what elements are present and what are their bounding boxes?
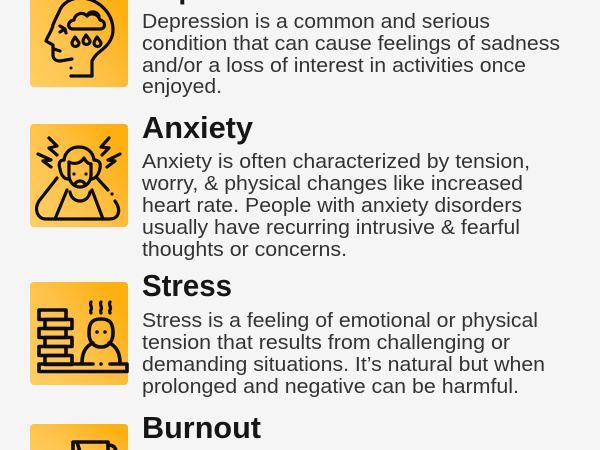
text: anxiety description: Anxiety is often characterized by tension,: [142, 151, 530, 173]
text: anxiety description: [141, 151, 530, 261]
text: anxiety description: heart rate. People with anxiety disorders: [142, 195, 522, 217]
text: depression description: [142, 11, 560, 98]
text: stress description: demanding situations. It’s natural but when: [142, 354, 545, 376]
text: depression description: enjoyed.: [142, 76, 222, 98]
icon: head with rain cloud: [30, 0, 128, 87]
text: stress description: [142, 310, 545, 398]
text: stress description: prolonged and negative can be harmful.: [142, 376, 519, 398]
icon: person beside paper stack: [30, 282, 128, 385]
text: anxiety description: thoughts or concerns.: [142, 239, 347, 261]
panel: anxiety: [30, 110, 530, 261]
heading: Anxiety: Anxiety: [142, 110, 254, 145]
heading: Burnout: Burnout: [142, 410, 261, 445]
text: stress description: Stress is a feeling of emotional or physical: [142, 310, 538, 332]
heading: Stress: Stress: [142, 268, 232, 303]
panel: stress: [30, 268, 545, 398]
icon: coffee mug: [30, 424, 128, 450]
text: anxiety description: worry, & physical changes like increased: [141, 173, 523, 195]
text: stress description: tension that results from challenging or: [142, 332, 510, 354]
icon: person holding head: [30, 124, 128, 227]
panel: depression: [30, 0, 560, 98]
text: depression description: condition that can cause feelings of sadness: [142, 33, 560, 55]
text: depression description: and/or a loss of interest in activities once: [142, 55, 526, 77]
text: anxiety description: usually have recurring intrusive & fearful: [142, 217, 520, 239]
panel: burnout: [30, 410, 261, 450]
text: depression description: Depression is a common and serious: [142, 11, 490, 33]
